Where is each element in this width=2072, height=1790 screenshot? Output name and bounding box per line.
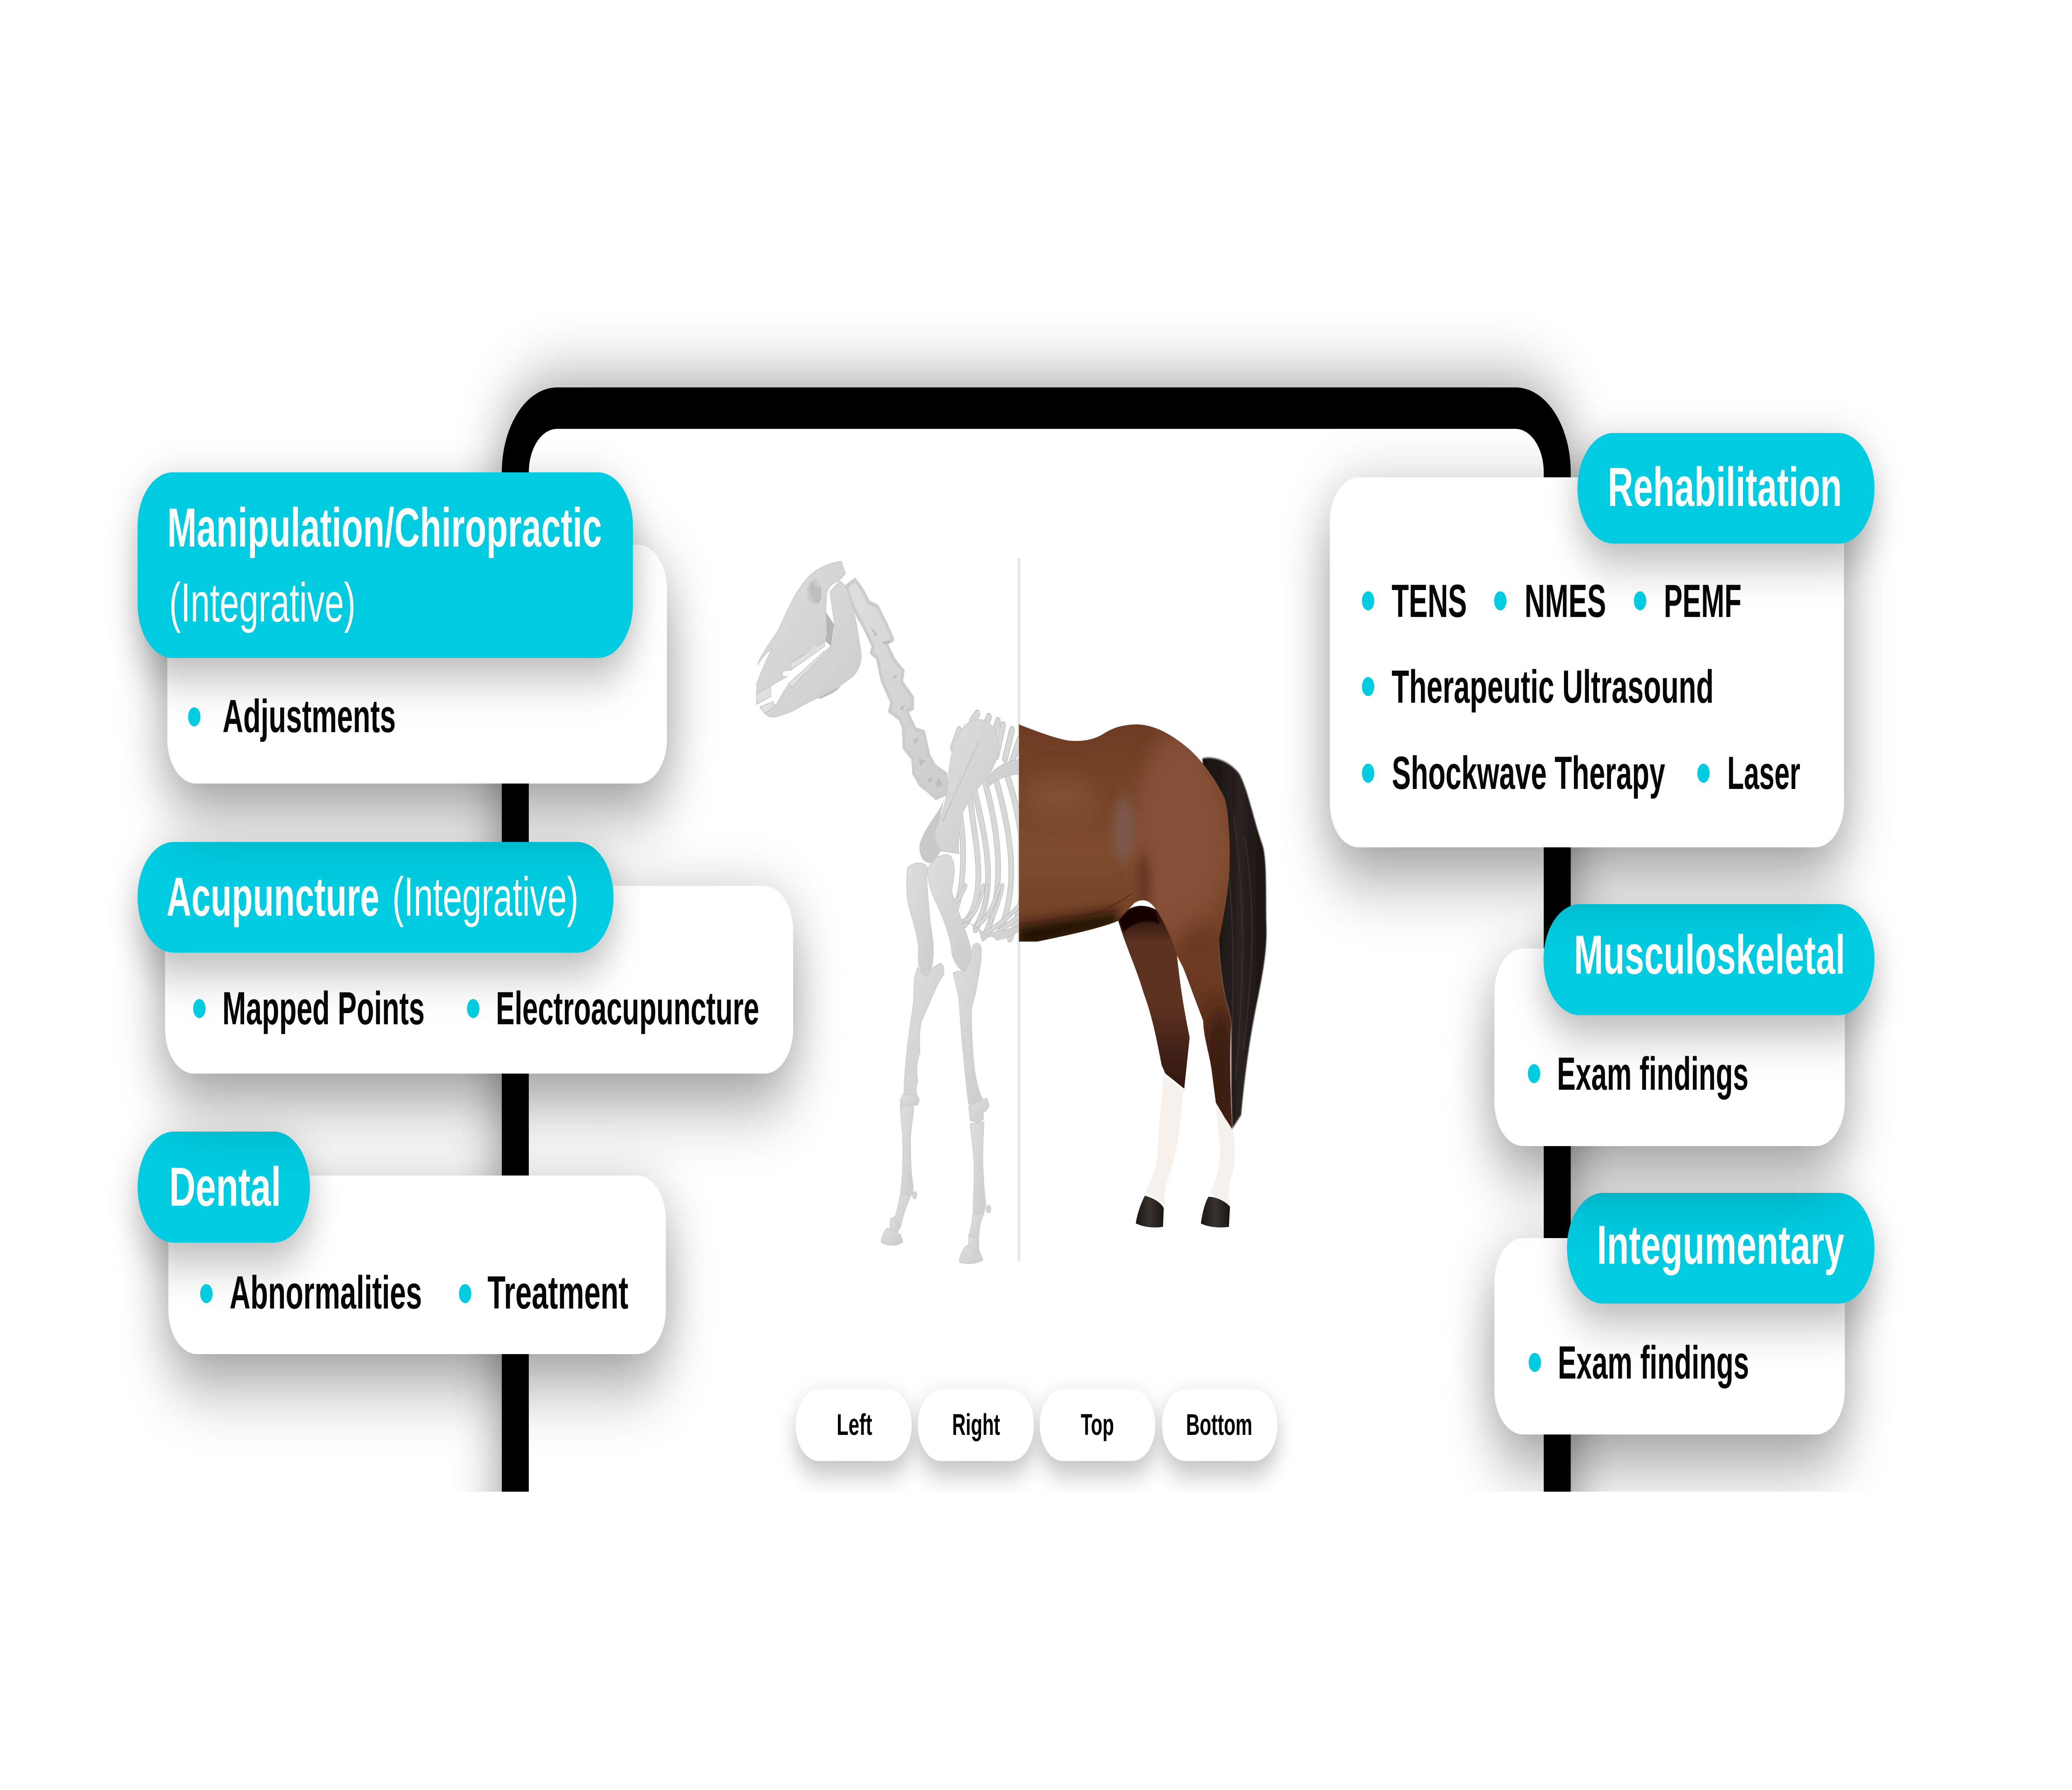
tail	[1202, 758, 1266, 1129]
button: Right	[918, 1389, 1034, 1461]
skull	[825, 612, 834, 646]
sternum and cartilage	[955, 886, 1020, 941]
panel text: Integumentary	[1597, 1214, 1844, 1275]
far socks and hooves	[1136, 1073, 1235, 1227]
panel text: Manipulation/Chiropractic	[167, 496, 602, 558]
button labels: Left	[837, 1408, 872, 1441]
tablet frame	[502, 387, 1571, 1738]
panel text: Dental	[169, 1156, 281, 1217]
panel text: NMES	[1525, 575, 1606, 627]
panel text: PEMF	[1664, 575, 1741, 627]
panel text	[1494, 1193, 1874, 1434]
panel text: Treatment	[487, 1267, 628, 1319]
mandible	[819, 686, 841, 699]
panel text: (Integrative)	[169, 571, 356, 633]
heading pill	[138, 1132, 310, 1243]
button: Left	[796, 1389, 912, 1461]
belly shadow	[1119, 907, 1160, 932]
panel: Manipulation/Chiropractic	[138, 472, 667, 784]
leg B	[953, 943, 983, 1105]
neck vertebrae	[846, 580, 948, 798]
panel: Dental	[138, 1132, 666, 1354]
heading pill	[138, 842, 613, 953]
forelegs	[881, 855, 1020, 1263]
panel text: TENS	[1392, 575, 1467, 627]
panel text	[138, 1132, 666, 1354]
panel text: (Integrative)	[392, 866, 579, 927]
button labels	[796, 1389, 1278, 1461]
panel text: Abnormalities	[230, 1267, 422, 1319]
panel text: Electroacupuncture	[496, 982, 759, 1035]
view buttons	[796, 1389, 1278, 1461]
panel text: Mapped Points	[222, 982, 425, 1035]
panel: Rehabilitation	[1330, 433, 1874, 847]
panel text	[1494, 904, 1874, 1146]
divider line	[1018, 558, 1020, 1261]
upper skeleton: skull, neck, ribs	[756, 561, 1023, 938]
card body	[1494, 1238, 1845, 1434]
panel text: Rehabilitation	[1608, 456, 1842, 518]
panel text	[138, 472, 667, 784]
panel text: Exam findings	[1558, 1337, 1749, 1389]
button labels: Bottom	[1186, 1408, 1252, 1441]
horse illustration	[756, 558, 1267, 1264]
panel text	[1330, 433, 1874, 847]
heading pill	[1567, 1193, 1874, 1304]
panel text: Shockwave Therapy	[1392, 747, 1665, 799]
scapula	[935, 720, 999, 854]
ribs	[956, 760, 1023, 938]
panel: Musculoskeletal	[1494, 904, 1874, 1146]
card body	[167, 545, 667, 784]
shoulder joint	[920, 798, 944, 863]
leg A	[904, 963, 944, 1098]
panel: Acupuncture	[138, 842, 793, 1074]
horse body	[1017, 724, 1266, 1227]
panel text: Laser	[1727, 747, 1800, 799]
card body	[1494, 948, 1845, 1146]
heading pill	[138, 472, 633, 658]
button labels: Top	[1081, 1408, 1114, 1441]
heading pill	[1544, 904, 1874, 1015]
panel text: Musculoskeletal	[1574, 924, 1845, 985]
humeri	[907, 863, 934, 976]
skeleton	[756, 561, 1023, 1263]
heading pill	[1578, 433, 1874, 544]
eye socket	[807, 579, 822, 604]
panel: Integumentary	[1494, 1193, 1874, 1434]
near body and hind leg	[1019, 724, 1232, 1129]
card body	[1330, 477, 1844, 847]
panel text: Therapeutic Ultrasound	[1392, 661, 1714, 713]
panel text: Exam findings	[1557, 1048, 1748, 1100]
spinous processes	[953, 714, 1019, 761]
panel text: Adjustments	[223, 690, 396, 743]
button: Bottom	[1162, 1389, 1278, 1461]
button: Top	[1040, 1389, 1155, 1461]
panel text	[138, 842, 793, 1074]
far hind leg	[1118, 906, 1190, 1089]
card body	[168, 1176, 666, 1354]
card body	[165, 886, 793, 1074]
teeth	[756, 642, 825, 714]
panel text: Acupuncture	[167, 866, 379, 927]
button labels: Right	[952, 1408, 1000, 1441]
